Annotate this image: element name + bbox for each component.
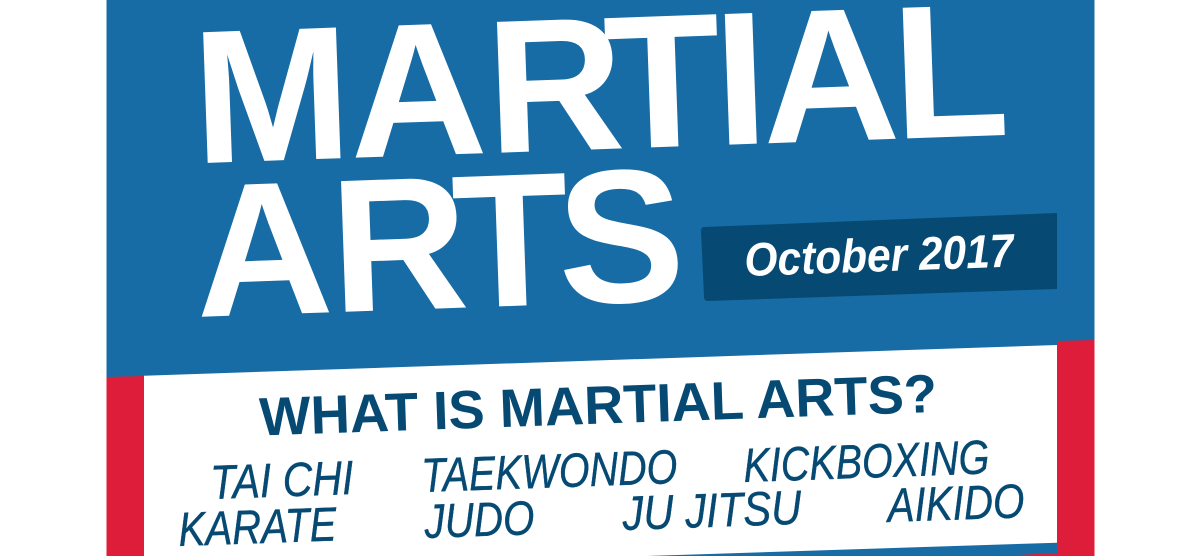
style: tai chi: TAI CHI xyxy=(210,452,354,510)
list of martial arts styles xyxy=(178,431,1025,556)
right red stripe xyxy=(1000,340,1094,556)
style: ju jitsu: JU JITSU xyxy=(621,482,803,541)
style: taekwondo: TAEKWONDO xyxy=(421,441,678,503)
date badge xyxy=(701,213,1057,301)
badge text: October 2017 xyxy=(743,224,1016,286)
style: aikido: AIKIDO xyxy=(884,475,1025,533)
style: judo: JUDO xyxy=(423,492,535,549)
title xyxy=(189,0,1012,358)
style: karate: KARATE xyxy=(178,498,338,556)
left red stripe xyxy=(106,376,144,556)
style: kickboxing: KICKBOXING xyxy=(743,431,990,493)
panel: white section xyxy=(144,345,1057,556)
badge background xyxy=(701,213,1057,301)
title line: ARTS: ARTS xyxy=(191,129,688,358)
heading: what is martial arts: WHAT IS MARTIAL ARTS? xyxy=(258,364,938,447)
